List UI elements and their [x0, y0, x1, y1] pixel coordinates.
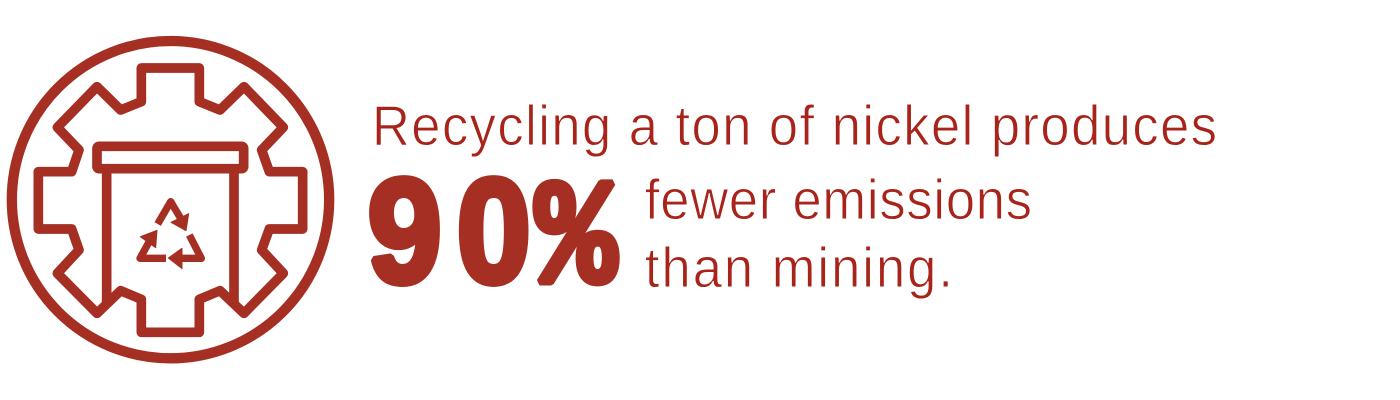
- big statistic: 0: [457, 149, 531, 314]
- big statistic: 9: [368, 149, 442, 314]
- text: fewer emissions: fewer emissions: [645, 167, 1032, 231]
- icon: recycling bin in gear inside circle: [12, 41, 329, 358]
- icon: bin body: [107, 169, 234, 303]
- heading line: Recycling a ton of nickel produces: [372, 93, 1217, 157]
- icon: bin lid: [97, 146, 244, 169]
- icon: outer circle ring: [12, 41, 329, 358]
- icon: gear outline: [38, 68, 303, 332]
- text: than mining: than mining.: [645, 235, 953, 299]
- big statistic: %: [536, 157, 617, 327]
- icon: recycling arrows: [140, 202, 201, 269]
